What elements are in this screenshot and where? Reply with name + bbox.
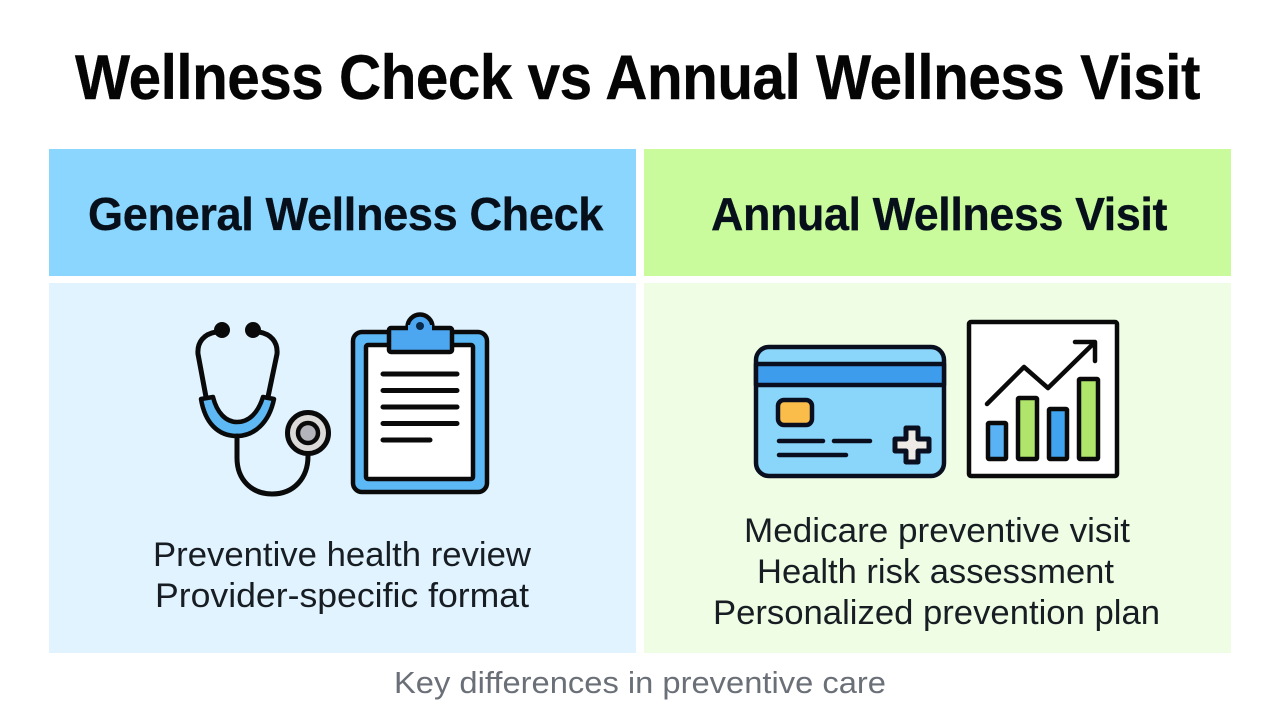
text block: general wellness check points: Provider-specific format [155, 577, 530, 615]
text block: general wellness check points: Preventive health review [153, 536, 531, 574]
text block: annual wellness visit points: Health risk assessment [757, 553, 1115, 591]
icon: stethoscope [198, 322, 328, 494]
caption: Key differences in preventive care [394, 665, 886, 700]
panel: general wellness check [49, 149, 636, 653]
text block: annual wellness visit points [713, 512, 1160, 632]
column heading: general: General Wellness Check [88, 188, 604, 240]
text block: annual wellness visit points: Personalized prevention plan [713, 594, 1160, 632]
panel body: annual [644, 283, 1231, 653]
column header background: general [49, 149, 636, 276]
panel body: general [49, 283, 636, 653]
column header background: annual [644, 149, 1231, 276]
icon: insurance card [756, 347, 944, 476]
title: Wellness Check vs Annual Wellness Visit [75, 43, 1200, 113]
icon: rising bar chart [969, 322, 1117, 476]
panel: annual wellness visit [644, 149, 1231, 653]
text block: annual wellness visit points: Medicare preventive visit [744, 512, 1131, 550]
text block: general wellness check points [153, 536, 531, 615]
column heading: annual: Annual Wellness Visit [711, 188, 1167, 240]
icon: clipboard [353, 314, 487, 492]
